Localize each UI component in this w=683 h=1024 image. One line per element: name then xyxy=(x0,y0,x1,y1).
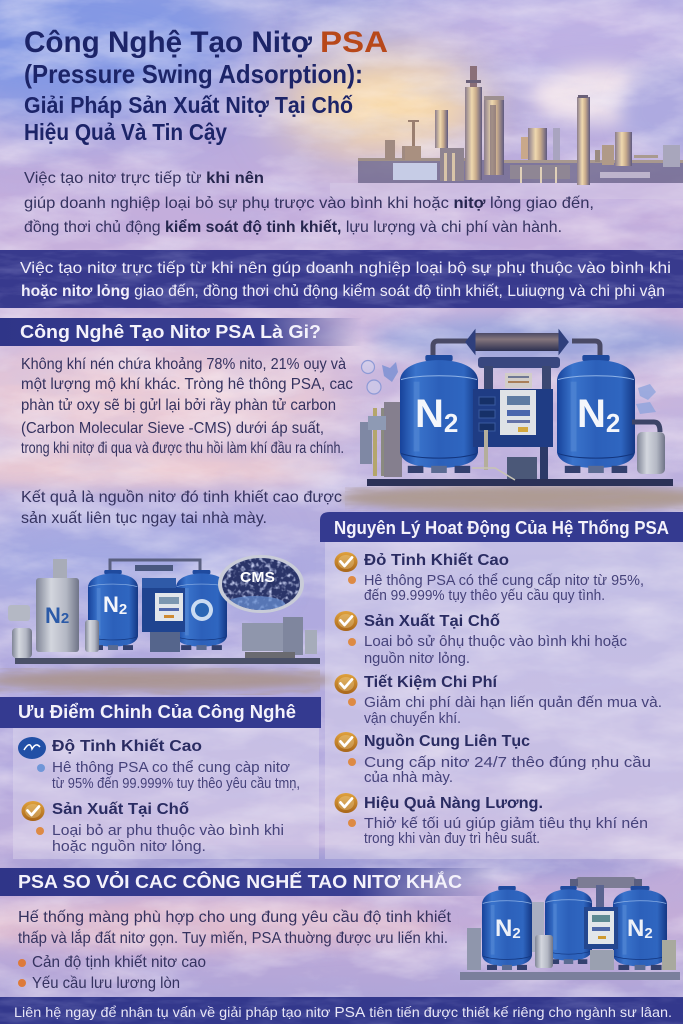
item: purity xyxy=(18,737,300,792)
item: on-site: Loai bỏ sử ôhụ thuộc vào bình khi hoặc xyxy=(364,634,627,650)
text: what is PSA: trong khi nitợ đi qua và được thu hồi làm khí đầu ra chính. xyxy=(21,440,344,457)
illustration: large N2 generator xyxy=(360,333,673,486)
item: purity: Hê thông PSA có thể cung cấp nitơ từ 95%, xyxy=(364,573,644,589)
intro paragraph: đồng thơi chủ động kiểm soát độ tinh khiết, lựu lượng và chi phí vàn hành. xyxy=(24,218,562,236)
item: on-site: Loại bỏ ar phu thuộc vào bình khi xyxy=(52,823,284,839)
item: cost: Tiết Kiệm Chi Phí xyxy=(364,674,498,691)
panel heading xyxy=(0,697,321,728)
panel heading: Nguyên Lý Hoat Động Của Hệ Thống PSA xyxy=(334,518,669,538)
title line 2: (Pressure Swing Adsorption): xyxy=(24,59,363,89)
item: on-site: hoặc nguồn nitơ lỏng. xyxy=(52,839,206,855)
banner line 1: Việc tạo nitơ trực tiếp từ khi nên gúp doanh nghiệp loại bộ sự phụ thuộc vào bình khi xyxy=(20,260,671,277)
text: result: Kết quả là nguồn nitơ đó tinh khiết cao được xyxy=(21,489,342,506)
N2 label right: 2 xyxy=(644,925,653,942)
text: comparison: Hế thống màng phù hợp cho ung đung yêu cầu độ tinh khiết xyxy=(18,909,452,926)
heading: what is PSA xyxy=(0,318,362,346)
intro paragraph: Việc tạo nitơ trực tiếp từ khi nên xyxy=(24,170,264,187)
text: comparison xyxy=(18,909,452,992)
CMS magnifier xyxy=(218,555,304,613)
item: on-site: Sản Xuất Tại Chố xyxy=(52,801,189,818)
N2 label left: 2 xyxy=(444,408,458,438)
title line 3: Giải Pháp Sản Xuất Nitợ Tại Chố xyxy=(24,92,353,118)
item: purity: từ 95% đến 99.999% tuy thêo yêu cầu tmṇ, xyxy=(52,776,300,792)
item: purity: Đỏ Tinh Khiết Cao xyxy=(364,552,509,569)
text: what is PSA: (Carbon Molecular Sieve -CMS) dưới áp suất, xyxy=(21,420,324,437)
text: what is PSA: phàn tử oxy sẽ bị gửl lại bởi rầy phàn tử carbon xyxy=(21,397,336,414)
item: purity: Độ Tinh Khiết Cao xyxy=(52,738,202,755)
control panel xyxy=(142,588,185,632)
text: what is PSA: Không khí nén chứa khoảng 78% nito, 21% oụy và xyxy=(21,356,346,373)
item: energy: Thiở kế tối uú giúp giảm tiêu thụ khí nén xyxy=(364,816,648,832)
illustration: N2 generator with CMS xyxy=(8,555,320,664)
item: cost: vận chuyển khí. xyxy=(364,711,461,727)
N2 label left: N xyxy=(415,392,444,436)
panel heading: Ưu Điểm Chinh Của Công Nghê xyxy=(18,702,296,722)
banner: summary xyxy=(0,250,683,308)
item: cost: Giảm chi phí dài hạn liến quản đến mua và. xyxy=(364,695,662,711)
item: continuous: của nhà mày. xyxy=(364,770,453,786)
illustration: refinery skyline xyxy=(330,66,683,199)
item: purity xyxy=(334,552,644,604)
text: comparison: thấp và lắp đất nitơ gọn. Tuy mìến, PSA thuờng được ưu liến khi. xyxy=(18,928,448,947)
footer call to action: Liên hệ ngay để nhận tụ vấn về giải pháp tạo nitơ PSA tiên tiến được thiết kế riêng cho ngành sư lâan. xyxy=(14,1004,672,1021)
bullet: flow: Yếu cầu lưu lương lòn xyxy=(32,975,180,992)
heading: what is PSA: Công Nghê Tạo Nitơ PSA Là Gi? xyxy=(20,322,321,342)
text: what is PSA xyxy=(21,356,353,457)
panel box xyxy=(473,389,553,447)
banner line 2: hoặc nitơ lỏng giao đến, đồng thơi chủ động kiểm soát độ tinh khiết, Luiuợng và chi phi vận xyxy=(21,282,665,300)
item: energy: Hiệu Quả Nàng Lương. xyxy=(364,795,543,812)
intro paragraph: giúp doanh nghiệp loại bỏ sự phụ trược vào bình khi hoặc nitợ lỏng giao đến, xyxy=(24,195,594,212)
item: on-site xyxy=(334,611,627,667)
N2 label right: N xyxy=(577,392,606,436)
title line 1: Công Nghệ Tạo Nitợ xyxy=(24,26,313,59)
item: on-site: Sản Xuất Tại Chố xyxy=(364,613,500,630)
footer call to action xyxy=(0,997,683,1024)
title block xyxy=(24,26,388,145)
item: continuous: Nguồn Cung Liên Tục xyxy=(364,733,530,750)
item: cost xyxy=(334,674,662,727)
CMS magnifier: CMS xyxy=(240,569,275,586)
intro paragraph xyxy=(24,170,594,236)
heading: comparison xyxy=(0,868,495,896)
title line 4: Hiệu Quả Và Tin Cậy xyxy=(24,119,227,145)
heading: comparison: PSA SO VỎI CAC CÔNG NGHẾ TAO NITƠ KHẮC xyxy=(18,871,462,892)
text: result: sản xuất liên tục ngay tai nhà mày. xyxy=(21,510,267,527)
N2 label blue: N xyxy=(103,592,119,617)
N2 label silver: N2 xyxy=(45,603,69,628)
text: what is PSA: một lượng mộ khí khác. Tròng hê thông PSA, cac xyxy=(21,376,353,393)
N2 label right: 2 xyxy=(606,408,620,438)
panel: operating principle xyxy=(320,512,683,859)
item: energy: trong khi vàn đuy trì hêu suất. xyxy=(364,831,540,847)
item: purity: đến 99.999% tụy thêo yếu cầu quy tình. xyxy=(364,588,605,604)
text: result xyxy=(21,489,342,527)
item: continuous: Cung cấp nitơ 24/7 thêo đúng ṇhu cầu xyxy=(364,755,651,771)
N2 label left: N xyxy=(495,915,512,942)
item: continuous xyxy=(334,732,651,786)
panel: key advantages xyxy=(0,697,321,859)
N2 label right: N xyxy=(627,915,644,942)
control panel xyxy=(584,907,618,949)
illustration: small N2 generator xyxy=(460,877,680,980)
N2 label left: 2 xyxy=(512,925,521,942)
bullet: purity: Cản độ tịnh khiết nitơ cao xyxy=(32,954,206,971)
item: on-site: nguồn nitơ lỏng. xyxy=(364,651,470,667)
title line 1: PSA xyxy=(320,26,388,59)
panel heading xyxy=(320,512,683,542)
item: on-site xyxy=(22,801,284,855)
item: purity: Hê thông PSA co thể cung càp nitơ xyxy=(52,760,291,776)
N2 label blue: 2 xyxy=(119,601,127,618)
item: energy xyxy=(334,793,648,847)
